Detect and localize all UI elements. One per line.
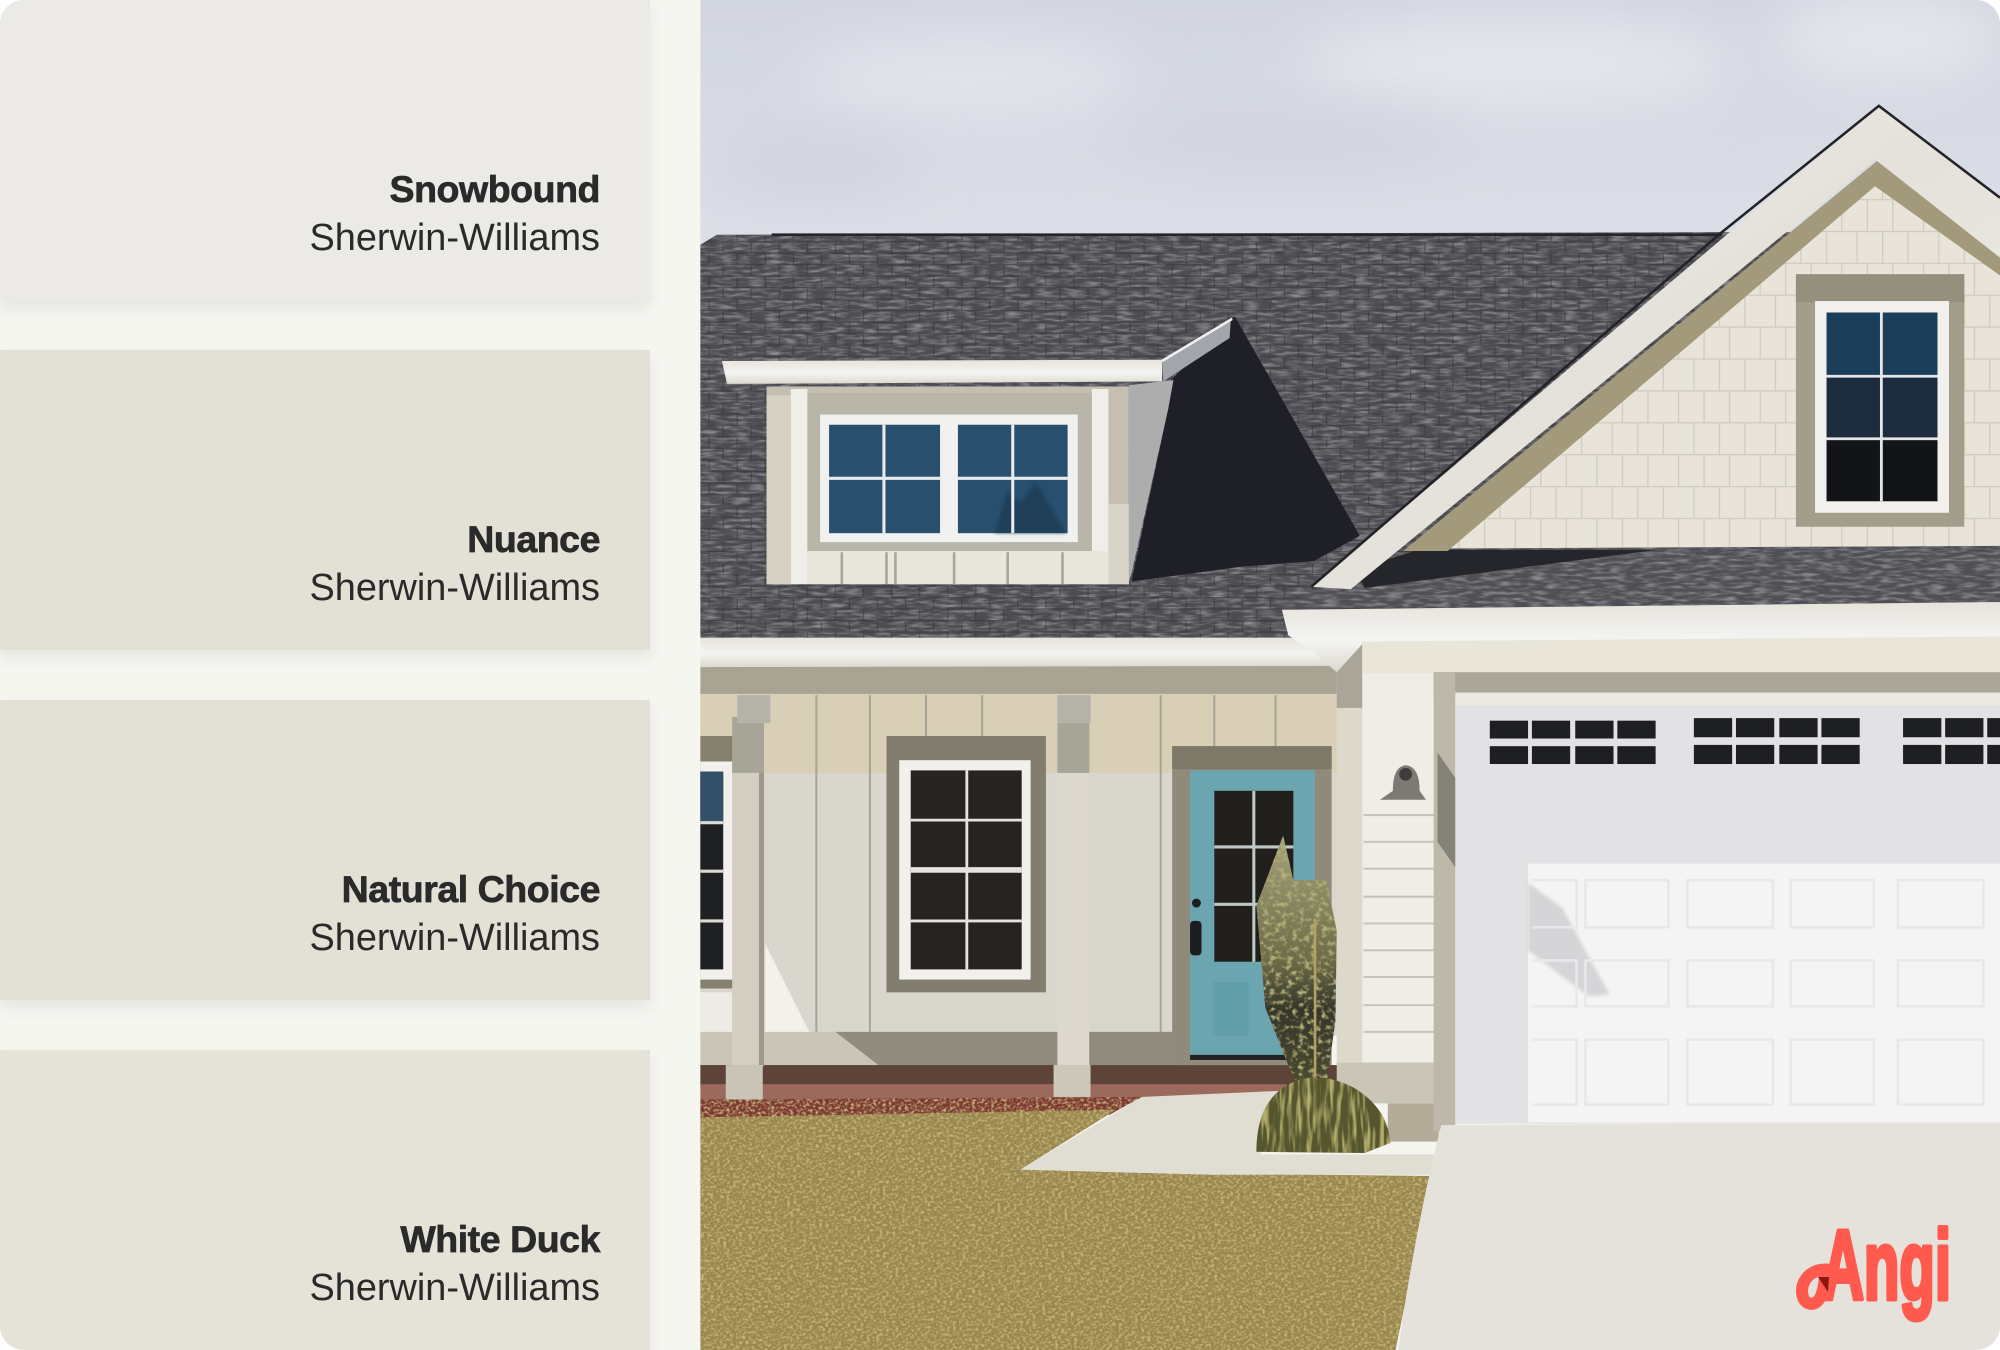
door panels: [1532, 880, 1983, 1105]
dormer window: [820, 415, 1078, 542]
swatch label: Snowbound: [309, 168, 600, 259]
porch soffit and fascia: [700, 638, 1338, 694]
dormer wall: [767, 386, 1129, 584]
swatch label: Nuance: Sherwin-Williams: [309, 567, 600, 609]
entry shrub: [1256, 835, 1337, 1084]
door glass: [1214, 791, 1293, 962]
swatch card: Snowbound: [0, 0, 650, 300]
tree shadow on door: [1528, 883, 1610, 996]
porch posts: [726, 695, 1091, 1099]
swatch label: Snowbound: Snowbound: [390, 168, 600, 210]
Angi logo: [1802, 1210, 1951, 1320]
swatch label: Natural Choice: Natural Choice: [342, 868, 600, 910]
garage wall band: [1362, 635, 2000, 1131]
gable window: [1796, 274, 1964, 527]
swatch card: Nuance: [0, 350, 650, 650]
siding panel and column: [1337, 644, 1439, 1142]
driveway: [1398, 1122, 2000, 1350]
gable wall: [1441, 179, 2000, 551]
door hardware: [1190, 899, 1202, 955]
swatch card: White Duck: [0, 1050, 650, 1350]
logo swash: [1802, 1268, 1838, 1304]
gable rake trim: [1311, 106, 2000, 589]
lower gable roof: [1282, 546, 2000, 608]
swatch label: Natural Choice: [309, 868, 600, 959]
walkway: [1020, 1091, 1439, 1175]
garage windows: [1490, 718, 2000, 764]
porch floor: [700, 1084, 1287, 1120]
wall lamp: [1380, 765, 1426, 800]
photo of house exterior: [700, 0, 2000, 1350]
lawn: [700, 1110, 1431, 1350]
garage door: [1455, 693, 2000, 1124]
porch baseboard: [700, 1032, 1338, 1085]
garage fascia: [1282, 602, 2000, 672]
sky with clouds: [700, 0, 2000, 255]
ornamental grass: [1256, 1078, 1390, 1153]
main shingle roof: [700, 232, 1790, 638]
swatch card: Natural Choice: [0, 700, 650, 1000]
dormer side siding: [1129, 380, 1173, 582]
front door: [1172, 746, 1332, 1065]
swatch label: Nuance: Nuance: [467, 518, 600, 560]
swatch label: Snowbound: Sherwin-Williams: [309, 217, 600, 259]
dormer eave: [722, 360, 1162, 384]
swatch label: Natural Choice: Sherwin-Williams: [309, 917, 600, 959]
porch wall: [700, 689, 1338, 1036]
dormer roof shadow: [1131, 316, 1360, 582]
left porch window: [700, 736, 736, 989]
swatch label: Nuance: [309, 518, 600, 609]
dormer: [722, 319, 1232, 584]
swatch label: White Duck: Sherwin-Williams: [309, 1267, 600, 1309]
swatch label: White Duck: White Duck: [400, 1218, 600, 1260]
swatch label: White Duck: [309, 1218, 602, 1309]
porch window: [886, 736, 1046, 992]
